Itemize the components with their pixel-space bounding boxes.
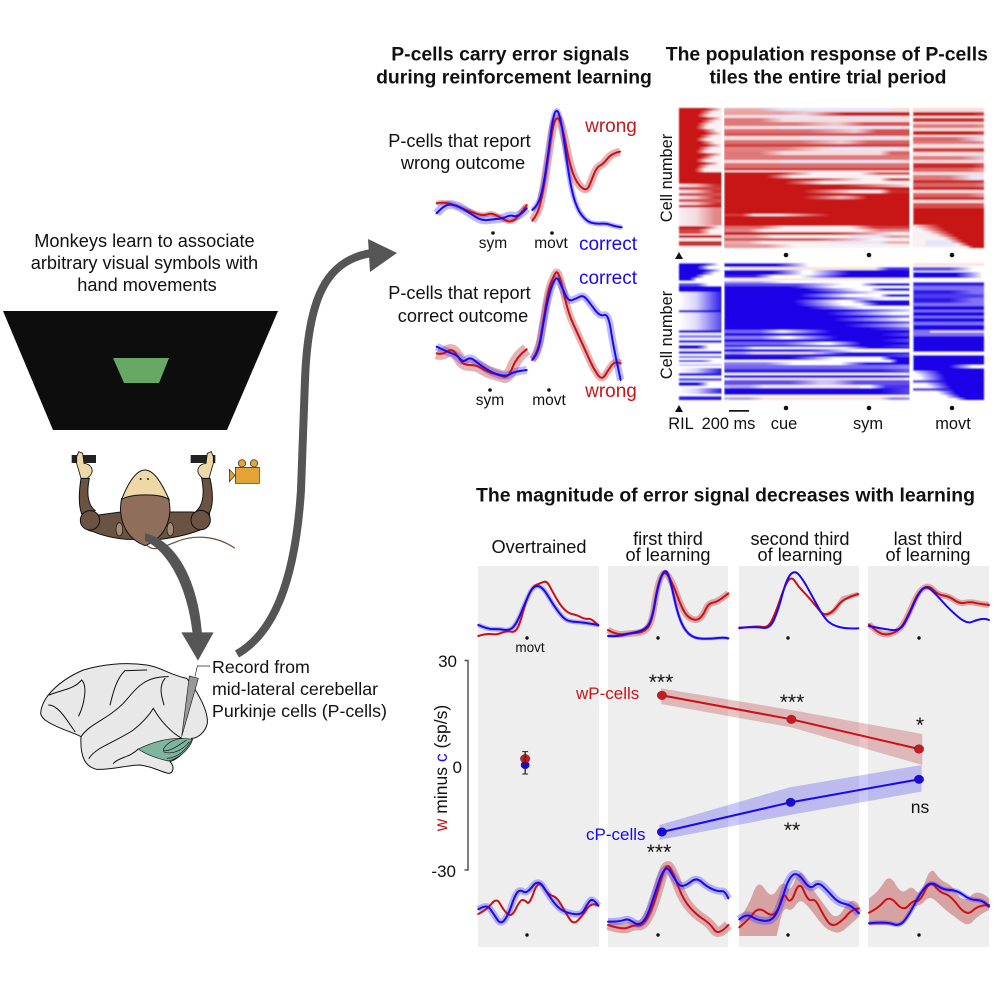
- icon: video camera: [229, 460, 259, 483]
- heading: error signals: during reinforcement learning: [376, 66, 652, 88]
- text: correct outcome cells: P-cells that report: [388, 283, 531, 303]
- column headings: of learning: [886, 545, 970, 565]
- axis: w minus c: [431, 652, 468, 881]
- charts: correct-outcome traces by stage: [478, 866, 989, 936]
- labels: cell groups and significance: *: [916, 714, 924, 737]
- chart: correct-outcome P-cells: [437, 268, 638, 409]
- labels: cell groups and significance: wP-cells: [575, 684, 639, 703]
- heading: error signals: P-cells carry error signals: [391, 44, 629, 66]
- labels: cell number axes: Cell number: [658, 133, 676, 222]
- event markers and time labels: RIL: [668, 415, 694, 433]
- labels: cell groups and significance: ns: [911, 797, 929, 817]
- labels: cell number axes: [658, 133, 676, 379]
- markers: movement onset, bottom row: [525, 933, 921, 937]
- column headings: Overtrained: [491, 537, 587, 557]
- left heading: monkeys learn: Monkeys learn to associate: [34, 231, 255, 251]
- column headings: first third: [633, 529, 703, 549]
- markers: movement onset, top row: movt: [515, 640, 545, 655]
- event markers and time labels: [668, 252, 971, 433]
- column headings: last third: [894, 529, 962, 549]
- chart: wrong-outcome P-cells: movt: [534, 235, 568, 252]
- text: recording site: Record from: [212, 657, 310, 677]
- icon: monkey brain with electrode: [41, 664, 210, 773]
- chart: wrong-outcome P-cells: correct: [579, 234, 638, 255]
- chart: wrong-outcome P-cells: sym: [479, 235, 507, 252]
- text: recording site: mid-lateral cerebellar: [212, 679, 378, 699]
- labels: cell groups and significance: **: [784, 819, 800, 842]
- chart: difference over learning: [520, 688, 924, 840]
- axis: w minus c: 0: [453, 758, 462, 777]
- chart: wrong-outcome P-cells: [437, 111, 638, 255]
- text: correct outcome cells: correct outcome: [398, 306, 528, 326]
- arrow: brain to results: [237, 239, 397, 654]
- heading: magnitude of error signal: The magnitude of error signal decreases with learning: [476, 484, 975, 506]
- column headings: of learning: [626, 545, 710, 565]
- labels: cell groups and significance: ***: [780, 691, 804, 714]
- event markers and time labels: cue: [771, 415, 797, 433]
- axis: w minus c: -30: [431, 862, 456, 881]
- column headings: of learning: [758, 545, 842, 565]
- labels: cell groups and significance: [575, 671, 929, 864]
- event markers and time labels: movt: [935, 415, 971, 433]
- text: recording site: Purkinje cells (P-cells): [212, 701, 387, 721]
- heading: population response: The population response of P-cells: [666, 44, 988, 66]
- left heading: monkeys learn: arbitrary visual symbols with: [31, 253, 258, 273]
- icon: monkey from above holding bars: [72, 452, 235, 549]
- charts: wrong-outcome traces by stage: [478, 571, 989, 639]
- chart: correct-outcome P-cells: correct: [579, 268, 638, 289]
- column headings: [491, 529, 970, 565]
- grey column backgrounds: [478, 566, 989, 947]
- axis: w minus c: w minus c (sp/s): [431, 705, 451, 832]
- axis: w minus c: 30: [438, 652, 457, 671]
- heatmap: correct-outcome population: [679, 260, 996, 402]
- column headings: second third: [750, 529, 850, 549]
- heading: population response: tiles the entire trial period: [709, 66, 947, 88]
- labels: cell groups and significance: cP-cells: [586, 825, 646, 844]
- chart: correct-outcome P-cells: sym: [476, 392, 504, 409]
- text: wrong outcome cells: wrong outcome: [400, 153, 525, 173]
- arrow: monkey to brain: [145, 533, 214, 661]
- labels: cell groups and significance: ***: [649, 671, 673, 694]
- labels: cell number axes: Cell number: [658, 290, 676, 379]
- markers: movement onset, top row: [515, 636, 921, 655]
- text: wrong outcome cells: P-cells that report: [388, 131, 531, 151]
- event markers and time labels: sym: [853, 415, 883, 433]
- chart: wrong-outcome P-cells: wrong: [584, 116, 637, 137]
- event markers and time labels: 200 ms: [702, 415, 755, 433]
- labels: cell groups and significance: ***: [647, 841, 671, 864]
- chart: correct-outcome P-cells: movt: [532, 392, 566, 409]
- heatmap: wrong-outcome population: [679, 106, 996, 250]
- left heading: monkeys learn: hand movements: [77, 275, 217, 295]
- chart: correct-outcome P-cells: wrong: [584, 381, 637, 402]
- icon: screen with green symbol: [3, 311, 278, 430]
